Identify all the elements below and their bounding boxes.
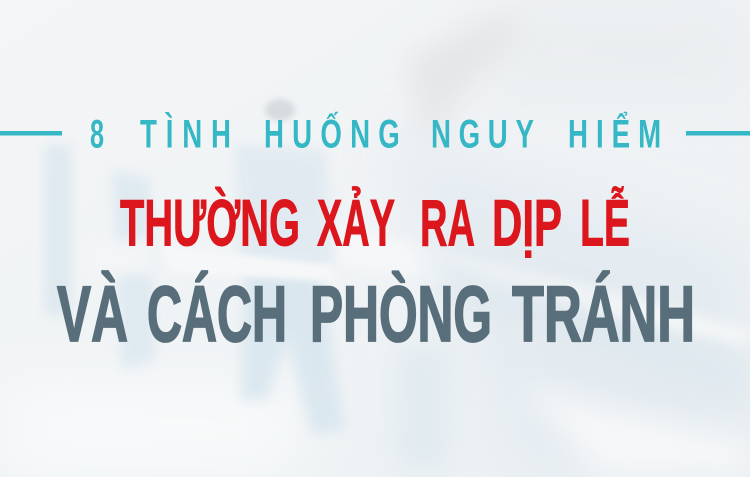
right accent line: [686, 131, 750, 136]
heading: 8 tình huống nguy hiểm: HIỂM: [568, 113, 661, 157]
heading: thường xảy ra dịp lễ: RA: [420, 186, 475, 260]
heading: và cách phòng tránh: VÀ: [57, 269, 128, 358]
heading: thường xảy ra dịp lễ: [120, 186, 630, 260]
heading: thường xảy ra dịp lễ: THƯỜNG: [120, 186, 300, 260]
heading: thường xảy ra dịp lễ: DỊP: [492, 186, 562, 260]
heading: thường xảy ra dịp lễ: XẢY: [317, 186, 395, 260]
left accent line: [0, 131, 62, 136]
heading: thường xảy ra dịp lễ: LỄ: [580, 186, 630, 260]
heading: và cách phòng tránh: [57, 269, 695, 358]
heading: và cách phòng tránh: PHÒNG: [310, 269, 492, 358]
heading: 8 tình huống nguy hiểm: 8: [90, 113, 104, 157]
heading: 8 tình huống nguy hiểm: NGUY: [431, 113, 534, 157]
heading: và cách phòng tránh: CÁCH: [147, 269, 287, 358]
heading: 8 tình huống nguy hiểm: HUỐNG: [264, 112, 400, 157]
heading: 8 tình huống nguy hiểm: TÌNH: [140, 113, 231, 157]
heading: 8 tình huống nguy hiểm: [90, 112, 661, 157]
